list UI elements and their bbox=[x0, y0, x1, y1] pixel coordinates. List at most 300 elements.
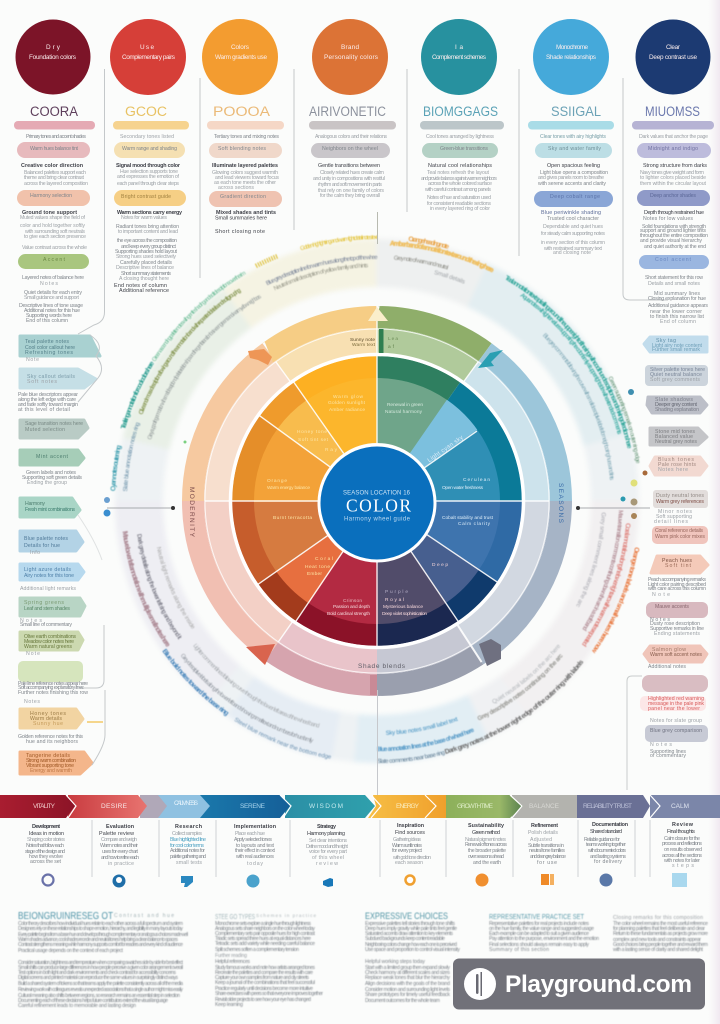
tag stack left: Refreshing tones bbox=[25, 350, 73, 356]
tag stack left: Olive earth combinations bbox=[24, 634, 76, 640]
article 3: Share prototypes for timely useful feedback bbox=[365, 992, 450, 998]
article 5: complex and new tools and constraints appear bbox=[613, 937, 701, 943]
outer annotation arcs: Dark grey notes at the lower right edge of the outer ring with labels bbox=[444, 660, 584, 754]
descriptor 2: Compare and weigh bbox=[101, 837, 137, 843]
tag stack right: Blush tones bbox=[658, 457, 694, 463]
article 2: Tetradic sets add variety while needing careful balance bbox=[215, 941, 315, 947]
navy pills and text: Short statement for this row bbox=[645, 275, 703, 281]
red pills and text: Additional reference bbox=[119, 288, 169, 294]
cool wedge labels: Cobalt stability and trust bbox=[442, 515, 494, 521]
chevrons bbox=[0, 795, 720, 818]
article 3: Align decisions with the goals of the brand bbox=[365, 981, 450, 987]
column 3: amber bbox=[202, 19, 284, 235]
descriptor 10: across all the sections bbox=[662, 853, 702, 859]
amber pills and text: across sections bbox=[218, 185, 254, 191]
sky blue circle: Shade relationships bbox=[546, 54, 596, 61]
descriptor 1: across the set bbox=[30, 859, 62, 865]
crimson pills and text: Creative color direction bbox=[21, 163, 83, 169]
article 1: Small shifts can produce large differences in how people perceive a given color arrangement overall bbox=[18, 965, 183, 971]
article 3: Neighboring colors change how each one is perceived bbox=[365, 942, 457, 948]
sky blue pills and text: Trusted cool character bbox=[547, 216, 599, 222]
descriptor 4: Apply selected tones bbox=[234, 837, 272, 843]
cool wedge labels: Calm clarity bbox=[458, 521, 491, 527]
red pills and text: each panel through clear steps bbox=[117, 181, 179, 187]
article 2: Analogous sets share neighbors on the color wheel today bbox=[215, 926, 315, 932]
article 4 bbox=[489, 912, 599, 953]
article 2: Split schemes soften a complementary tension bbox=[215, 947, 299, 953]
tag stack right: Quiet neutral balance bbox=[650, 372, 702, 378]
descriptor 1: stage of the design and bbox=[25, 849, 65, 855]
warm wedge labels: Orange bbox=[267, 478, 287, 484]
center disc bbox=[318, 444, 436, 562]
logo mark bbox=[464, 968, 496, 1000]
burnt orange pills and text: Closely related hues create calm bbox=[320, 170, 384, 176]
tag stack right: Light color pairing described bbox=[648, 582, 706, 588]
navy pills and text: Mid summary lines bbox=[654, 291, 700, 297]
bottom descriptor columns bbox=[25, 822, 702, 869]
outer annotation arcs: Small details bbox=[434, 270, 465, 284]
article 1: Reviewing work with colleagues reveals unexpected associations that a single author might miss easily bbox=[18, 987, 183, 993]
tag stack right: Stone mid tones bbox=[655, 429, 695, 435]
cool wedge labels: Cerulean bbox=[463, 477, 490, 483]
outer annotation arcs: Slate comments near base ring bbox=[376, 750, 446, 764]
crimson pills and text: Balanced palettes support each bbox=[24, 170, 86, 176]
column dividers bbox=[78, 69, 668, 334]
tag stack right: Supporting lines bbox=[650, 749, 686, 755]
tag stack left: Notes bbox=[24, 699, 40, 705]
cool wedge labels: Light cyan sky bbox=[427, 435, 465, 464]
descriptor 3: for cool color terms bbox=[170, 843, 204, 849]
article 4: on the hue family, the value range and suggested usage bbox=[489, 926, 594, 932]
tag stack right: Additional notes bbox=[648, 664, 686, 670]
descriptor 6: Inspiration bbox=[397, 823, 424, 829]
icon: squares bbox=[541, 874, 554, 885]
descriptor 7: and the earth bbox=[473, 860, 501, 866]
article 3: Use space and proportion to control visual intensity bbox=[365, 947, 460, 953]
tag stack left: Spring greens bbox=[24, 600, 64, 606]
navy pills and text: and provide visual hierarchy bbox=[640, 238, 702, 244]
article 2: Keep a journal of the combinations that feel successful bbox=[215, 980, 315, 986]
descriptor 1: Ideas in motion bbox=[29, 831, 64, 837]
tag stack right: Warm soft accent notes bbox=[650, 652, 702, 658]
navy circle: Deep contrast use bbox=[649, 54, 697, 61]
tag stack right: Notes bbox=[650, 742, 672, 748]
descriptor 5: Set clear intentions bbox=[309, 838, 347, 844]
descriptor 2: and how to refine each bbox=[101, 855, 139, 861]
icon: ring bbox=[42, 874, 54, 886]
navy pills and text: to finish this narrow list bbox=[650, 314, 705, 320]
descriptor 7: Natural pigment notes bbox=[465, 837, 506, 843]
outer annotation arcs: Blue grey comments following the curve with small descriptive labels for neighboring hues and tints bbox=[542, 332, 614, 480]
descriptor 10: Final thoughts bbox=[667, 829, 695, 835]
outer annotation arcs: Mauve lower left annotation with multiple small notes here bbox=[122, 530, 170, 648]
tag stack left: Sunny hue bbox=[33, 721, 63, 727]
descriptor 6: Find sources bbox=[395, 830, 425, 836]
tag stack right: Supportive remarks in line bbox=[650, 626, 704, 632]
teal pills and text: Natural cool relationships bbox=[428, 163, 492, 169]
red and purple wedge labels: Royal bbox=[385, 597, 404, 603]
arrow: orange bbox=[248, 349, 272, 365]
descriptor 10: process and reflections bbox=[662, 841, 702, 847]
crimson pills and text: Quiet details for each entry bbox=[24, 290, 82, 296]
tag stack left: Note bbox=[26, 651, 40, 657]
descriptor 1: Notes that follow each bbox=[26, 843, 64, 849]
article 1: BEIONGRUINRESEG OT bbox=[18, 911, 113, 922]
sky blue pills and text: and closing note bbox=[553, 250, 591, 256]
tag stack left: Honey tones bbox=[30, 711, 66, 717]
article 2: Helpful references bbox=[215, 959, 250, 965]
tag stack right: Further small remark bbox=[652, 347, 700, 353]
navy pills and text: Notes for low values bbox=[643, 216, 693, 222]
tag stack right: Notes for slate group bbox=[650, 718, 702, 724]
descriptor 8: and clean grey balance bbox=[530, 854, 566, 860]
article 5: Return to these fundamentals as projects grow more bbox=[613, 931, 708, 937]
tag stack right: message in the pale pink bbox=[648, 701, 704, 707]
teal pills and text: in every layered ring of color bbox=[430, 206, 490, 212]
article 1: Documenting each of these decisions helps future contributors extend the visual language bbox=[18, 998, 168, 1004]
red pills and text: to important content and lead bbox=[118, 229, 178, 235]
red pills and text: End notes of column bbox=[114, 283, 167, 289]
tag stack right: Ending statements bbox=[654, 631, 700, 637]
navy pills and text: and quiet authority at the end bbox=[644, 244, 706, 250]
tag stack right: Soft tint bbox=[665, 563, 692, 569]
crimson pills and text: Value contrast across the whole bbox=[22, 245, 87, 251]
tag stack right: Deeper grey content bbox=[655, 402, 698, 408]
descriptor 8: neutral tone families bbox=[529, 848, 565, 854]
navy pills and text: End of column bbox=[660, 319, 696, 325]
teal pills and text: for consistent readable sections bbox=[427, 201, 491, 207]
burnt orange pills and text: that rely on one family of colors bbox=[318, 188, 384, 194]
crimson circle bbox=[16, 20, 90, 94]
wedge labels bbox=[267, 394, 494, 617]
heading: SSIIGAL bbox=[551, 104, 601, 119]
tag stack left: Additional light remarks bbox=[20, 586, 76, 592]
amber pills and text: Mixed shades and tints bbox=[216, 210, 276, 216]
sky blue pills and text: Blue periwinkle shading bbox=[541, 210, 601, 216]
tag stack right: Minor notes bbox=[658, 509, 692, 515]
bottom text articles bbox=[18, 911, 708, 1009]
heading: AIRIVONETIC bbox=[309, 104, 386, 119]
article 3: Subdued backgrounds keep content readable bbox=[365, 936, 445, 942]
top ring label green: af bbox=[388, 344, 395, 350]
tag stack left: Cool color callout here bbox=[25, 345, 75, 351]
descriptor 6: for every project bbox=[392, 848, 423, 854]
descriptor 3: Blue highlighted line bbox=[170, 837, 206, 843]
tag stack right: of commentary bbox=[650, 753, 686, 759]
navy pills and text: Dark values that anchor the page bbox=[639, 134, 708, 140]
tag stack right: Dusty rose description bbox=[650, 621, 700, 627]
burnt orange pills and text: and unity in compositions with restful bbox=[313, 176, 385, 182]
tag stack right: Notes bbox=[650, 617, 670, 623]
crimson circle: Foundation colors bbox=[29, 54, 76, 61]
sky blue pills and text: and gives panels room to breathe bbox=[538, 175, 604, 181]
warm wedge labels: Warm glow bbox=[333, 394, 364, 400]
descriptor 3 bbox=[170, 824, 206, 866]
tag stack left: Warm natural greens bbox=[24, 644, 72, 650]
column 2: red bbox=[110, 19, 189, 294]
outer annotation arcs: Coral annotation along the lower right arc with warm notes repeated bbox=[582, 522, 631, 648]
chevron labels: CALM bbox=[671, 803, 689, 810]
tag stack right: detail lines bbox=[654, 519, 688, 525]
navy pills and text: near the lower corner bbox=[650, 309, 702, 315]
outer annotation arcs: Dark grey details along the lower left ring and beyond it bbox=[136, 534, 182, 640]
article 1: Contrast strengthens meaning while harmony supports comfort for readers and every kind of audience bbox=[18, 942, 183, 948]
outer annotation arcs: Blue bold notes toward the base ring bbox=[162, 648, 229, 717]
tag stack left: Teal palette notes bbox=[25, 339, 69, 345]
bottom icons bbox=[42, 873, 687, 888]
red pills and text: Carefully placed details bbox=[120, 260, 172, 266]
outer annotation arcs: Sky blue notes small label text bbox=[386, 716, 458, 736]
outer annotation arcs: Blue annotation lines at the base of wheel here bbox=[376, 728, 474, 752]
cool wedge labels: Open water freshness bbox=[442, 485, 484, 491]
teal circle bbox=[421, 19, 497, 95]
descriptor 9: Documentation bbox=[592, 822, 628, 828]
descriptor 10: Review bbox=[672, 822, 694, 828]
article 2: Share exercises with peers so that everyone improves together bbox=[215, 991, 323, 997]
tag stack left: Energy and warmth bbox=[30, 768, 72, 774]
tag stack left: Supporting soft green details bbox=[22, 475, 82, 481]
article 1: Practical usage depends on the context of each project bbox=[18, 948, 124, 954]
amber pills and text: and lead viewers toward focus bbox=[215, 175, 279, 181]
article 3: Start with a limited group then expand slowly bbox=[365, 965, 450, 971]
article 1: Contrast and hue bbox=[114, 913, 174, 919]
article 2 bbox=[215, 913, 323, 1008]
descriptor 9: and lasting systems bbox=[590, 854, 626, 860]
top triangle marker bbox=[368, 307, 388, 321]
descriptor 8: for use bbox=[537, 860, 557, 866]
tag stack right bbox=[640, 337, 708, 759]
descriptor 1: Shaping color stories bbox=[27, 837, 65, 843]
tag stack right: Blue grey comparison bbox=[650, 728, 702, 734]
warm wedge labels bbox=[267, 394, 366, 577]
red circle: Use bbox=[140, 44, 154, 51]
cool wedge labels bbox=[385, 402, 494, 527]
tag stack right: Neutral grey notes bbox=[655, 439, 697, 445]
article 2: Recreate the palettes and compare the results with care bbox=[215, 970, 313, 976]
sky blue circle: Monochrome bbox=[556, 44, 588, 51]
navy pills and text: Cool accent bbox=[655, 257, 692, 263]
article 1 bbox=[18, 911, 188, 1009]
descriptor 10: steps bbox=[672, 863, 694, 869]
descriptor 7: Green method bbox=[472, 830, 500, 836]
red and purple wedge labels: Passion and depth bbox=[333, 604, 370, 610]
heading: POOOA bbox=[213, 104, 270, 119]
tag stack left: Leaf and stem shades bbox=[24, 606, 70, 612]
axis lines and markers bbox=[104, 212, 650, 795]
burnt orange circle: Personality colors bbox=[324, 54, 378, 61]
crimson pills and text: Primary tones and accent shades bbox=[26, 134, 86, 140]
descriptor 6 bbox=[392, 823, 431, 866]
sky blue pills and text: with restrained summary text bbox=[544, 246, 603, 252]
descriptor 7: Renewal of tones across bbox=[465, 842, 507, 848]
tag stack left: Soft accompanying explanatory lines bbox=[18, 685, 84, 691]
outer annotation arcs: Lighter comment lines following curve through the lower left area of the wheel band bbox=[193, 643, 320, 728]
descriptor 4: today bbox=[247, 861, 263, 867]
arrow: red bbox=[246, 644, 275, 665]
tag stack left: Airy notes for this tone bbox=[24, 573, 74, 579]
tag stack right: Salmon glow bbox=[652, 647, 686, 653]
article 1: Test options in both light and dark environments and check contrast for accessibility concerns bbox=[18, 970, 176, 976]
outer annotation arcs: Blue grey description line for warm hues along the top of the wheel bbox=[265, 254, 378, 286]
sky blue pills and text: Clear tones with airy highlights bbox=[540, 134, 606, 140]
right connector line bbox=[627, 676, 642, 790]
column 1: crimson bbox=[14, 20, 95, 324]
chevron labels: DESIRE bbox=[101, 803, 128, 810]
tag stack left: Meadow color notes here bbox=[24, 639, 74, 645]
left ring vertical label: MODERNITY bbox=[188, 487, 195, 538]
article 3 bbox=[365, 911, 460, 1004]
sky blue pills and text: Deep cobalt range bbox=[550, 194, 600, 200]
article 3: Consider motion and surrounding light levels bbox=[365, 987, 450, 993]
descriptor 7: Sustainability bbox=[468, 823, 504, 829]
amber pills and text: Short closing note bbox=[215, 229, 265, 235]
crimson pills and text: theme and bring clear contrast bbox=[24, 175, 85, 181]
red pills and text: and expresses the emotion of bbox=[117, 174, 180, 180]
outer annotation arcs: Neutral light remarks along the inside bbox=[156, 546, 195, 629]
amber pills and text: Gradient direction bbox=[220, 194, 266, 200]
descriptor 2 bbox=[99, 824, 139, 867]
descriptor 3: Collect samples bbox=[172, 831, 202, 837]
article 3: Helpful working steps today bbox=[365, 959, 425, 965]
article 2: STEE GO TYPES bbox=[215, 914, 255, 921]
tag stack left: Ending the group bbox=[27, 480, 67, 486]
tag stack left: Soft notes bbox=[27, 379, 57, 385]
outer annotation arcs: Mauve transition comments continuing down the arc in a soft band bbox=[582, 510, 624, 632]
article 2: Revisit older projects to see how your eye has changed bbox=[215, 997, 311, 1003]
descriptor 8 bbox=[528, 823, 566, 866]
descriptor 7 bbox=[465, 823, 507, 866]
teal pills and text: Cool tones arranged by lightness bbox=[426, 134, 494, 140]
descriptor 4: with real audiences bbox=[236, 854, 274, 860]
article 1: Every palette begins from a base hue and develops through complementary or analogous choices made well bbox=[18, 932, 188, 938]
bottom column dividers bbox=[92, 820, 650, 877]
descriptor 6: each season bbox=[395, 860, 423, 866]
article 1: Designers rely on these relationships to shape emotion, hierarchy, and legibility in many layouts today bbox=[18, 926, 183, 932]
crimson pills and text: Muted values shape the field of bbox=[20, 215, 86, 221]
column 7: navy bbox=[632, 20, 714, 325]
right ring vertical label: SEASONS bbox=[557, 483, 564, 524]
outer annotation arcs: Cyan notes outer ring bbox=[110, 444, 123, 492]
crimson pills and text: across the layered composition bbox=[24, 181, 88, 187]
top ring label yellow: Sunny note bbox=[350, 337, 375, 343]
red circle: Complementary pairs bbox=[122, 54, 175, 61]
red pills and text: Radiant tones bring attention bbox=[116, 224, 179, 230]
navy pills and text: Details and small notes bbox=[648, 281, 700, 287]
crimson pills and text: color and hold together softly bbox=[20, 223, 85, 229]
icon: bulb bbox=[406, 876, 414, 884]
navy pills and text: Depth through restrained hue bbox=[644, 210, 704, 216]
article 4: REPRESENTATIVE PRACTICE SET bbox=[489, 912, 584, 921]
navy pills and text bbox=[632, 121, 714, 325]
chevron labels: SERENE bbox=[240, 803, 266, 810]
column 4: burnt orange bbox=[309, 19, 396, 199]
tag stack left: hue and its neighbors bbox=[26, 739, 78, 745]
navy circle bbox=[636, 20, 710, 94]
article 5 bbox=[613, 915, 708, 953]
top ring label green bbox=[379, 329, 398, 353]
tag stack left: Mint accent bbox=[36, 454, 69, 460]
warm wedge labels: Soft tint set bbox=[298, 437, 329, 443]
article 2: Schemes in practice bbox=[256, 913, 316, 918]
chevron labels: BALANCE bbox=[529, 803, 560, 810]
icon: shield bbox=[246, 874, 260, 888]
sky blue pills and text: in every section of this column bbox=[541, 240, 605, 246]
outer annotation arcs: Golden highlight ring and warm light detail notes text bbox=[300, 234, 378, 251]
article 3: Document outcomes for the whole team bbox=[365, 998, 440, 1004]
tag stack right: Pale rose hints bbox=[658, 462, 696, 468]
warm wedge labels: Amber radiance bbox=[329, 407, 365, 413]
arrow: slate bbox=[479, 639, 501, 666]
descriptor 9: Reliable guidance for bbox=[584, 837, 620, 843]
cool wedge labels: Natural harmony bbox=[385, 409, 423, 415]
navy pills and text: Midnight and indigo bbox=[648, 146, 698, 152]
tag stack right: Sky tag bbox=[656, 338, 676, 344]
sky blue pills and text: for steady calm supporting notes bbox=[541, 231, 605, 237]
amber circle: Warm gradients use bbox=[215, 54, 267, 61]
warm wedge labels: Coral bbox=[315, 556, 333, 562]
heading: GCOC bbox=[125, 104, 167, 119]
tag stack left: Sky callout details bbox=[27, 374, 75, 380]
red pills and text: Bright contrast guide bbox=[121, 194, 171, 200]
outer annotation arcs: Grey descriptive notes continuing on the arc bbox=[477, 654, 563, 720]
descriptor 2: uses for every chart bbox=[102, 849, 139, 855]
outer annotation arcs: Green supporting remark on outer ring edge bbox=[608, 376, 640, 464]
tag stack left: Fresh mint combinations bbox=[25, 507, 75, 513]
article 3: EXPRESSIVE CHOICES bbox=[365, 911, 448, 921]
descriptor 10: on results observed bbox=[664, 847, 702, 853]
amber circle bbox=[202, 19, 278, 95]
crimson pills and text: Small guidance and support bbox=[24, 295, 80, 301]
outer annotation arcs: Grey note of warm and neutral bbox=[394, 255, 449, 270]
chevron process bar bbox=[0, 795, 720, 818]
burnt orange pills and text: Analogous colors and their relations bbox=[315, 134, 387, 140]
article 5: with a lasting sense of clarity and shared delight bbox=[613, 947, 704, 953]
tag stack left: Pale lime reference notes appear here bbox=[18, 681, 88, 687]
heading: BIOMGGAGS bbox=[423, 104, 498, 119]
descriptor 8: Polish details bbox=[528, 830, 558, 836]
outer ring segments bbox=[120, 244, 634, 758]
outer annotation arcs: Grey descriptive labels along the lower left band showing small text and numbers for hue family bbox=[180, 653, 314, 744]
top ring label green: Lea bbox=[388, 336, 398, 342]
descriptor 9: teams working together bbox=[586, 842, 626, 848]
right callout tags bbox=[627, 337, 708, 790]
left connector lines bbox=[60, 335, 105, 765]
amber pills and text: Tertiary tones and mixing notes bbox=[214, 134, 279, 140]
tag stack left: Small line of commentary bbox=[20, 622, 72, 628]
teal pills and text: Green-blue transitions bbox=[440, 146, 488, 152]
wedge divider lines bbox=[205, 306, 549, 662]
crimson circle: Dry bbox=[46, 44, 61, 51]
article 1: Color theory describes how individual hues relate to each other across a full spectrum and system bbox=[18, 921, 183, 927]
wordmark: Playground.com bbox=[505, 971, 692, 998]
descriptor 8: Subtle transitions in bbox=[528, 843, 564, 849]
tag stack left bbox=[18, 336, 100, 774]
sky blue circle bbox=[533, 19, 609, 95]
top ring label yellow bbox=[350, 337, 376, 348]
article 2: Triadic sets spread three hues at equal distances here bbox=[215, 936, 311, 942]
tag stack right: Mauve accents bbox=[655, 604, 689, 610]
amber pills and text: Small summaries here bbox=[215, 216, 267, 222]
center disc: SEASON LOCATION 16 bbox=[343, 490, 411, 496]
tag stack right: Light airy note content bbox=[652, 343, 703, 349]
ring labels bbox=[188, 329, 564, 670]
teal circle: Ia bbox=[455, 44, 463, 51]
descriptor 8: Refinement bbox=[531, 823, 558, 829]
tag stack left: Light azure details bbox=[24, 567, 71, 573]
outer annotation arcs: Orange tone labels and small values here now bbox=[592, 546, 640, 654]
tag stack left: Muted selection bbox=[25, 427, 65, 433]
crimson pills and text bbox=[14, 121, 95, 324]
